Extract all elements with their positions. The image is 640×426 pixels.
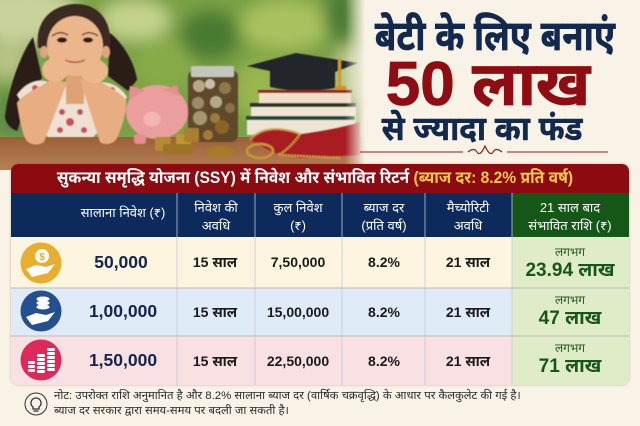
title line 3: से ज्यादा का फंड [382, 110, 582, 148]
header: investment period [194, 200, 238, 233]
header: total investment: (₹) [290, 218, 306, 233]
row 3 maturity: 21 साल [446, 353, 490, 369]
row 3 background [11, 336, 629, 385]
row 1 result: 23.94 लाख [525, 260, 615, 281]
coin stacks [155, 137, 171, 151]
row 1 total: 7,50,000 [271, 254, 325, 270]
row 3 result: लगभग [555, 341, 585, 355]
result column background [512, 237, 629, 385]
icon: gold coin in hand: $ [39, 252, 45, 263]
red cloth with gold jewellery [250, 122, 360, 158]
row 2 result: 47 लाख [539, 308, 601, 329]
header: expected amount: संभावित राशि (₹) [528, 218, 612, 233]
row 3 rate: 8.2% [368, 353, 400, 369]
face [66, 70, 84, 104]
header: maturity period [446, 200, 490, 233]
row 3 period: 15 साल [193, 353, 237, 369]
hair and pigtails [5, 37, 42, 131]
row 2 period: 15 साल [193, 304, 237, 320]
header: investment period: निवेश की [194, 200, 238, 215]
row 2 result [538, 293, 602, 329]
title line 2: 50 lakh: 50 लाख [386, 50, 590, 119]
header: interest rate: ब्याज दर [364, 200, 404, 215]
column and row grid lines [11, 193, 629, 385]
header: investment period: अवधि [202, 218, 230, 233]
header: expected amount [528, 200, 612, 233]
column header band [11, 193, 629, 237]
row 1 rate: 8.2% [368, 254, 400, 270]
row 1 background [11, 237, 629, 288]
header: interest rate: (प्रति वर्ष) [361, 218, 407, 233]
title line 1: बेटी के लिए बनाएं [375, 12, 615, 59]
icon: blue coin stack in hand [20, 290, 62, 332]
header: expected amount: 21 साल बाद [540, 200, 600, 215]
icon: gold coin in hand [20, 242, 62, 284]
icon: light bulb [24, 392, 48, 416]
piggy bank [126, 85, 188, 139]
ornamental divider [360, 145, 608, 154]
row 2 annual amount: 1,00,000 [89, 301, 157, 321]
table heading text: सुकन्या समृद्धि योजना (SSY) में निवेश और संभावित रिटर्न (ब्याज दर: 8.2% प्रति वर्ष) [57, 169, 573, 187]
hero photo: girl with piggy bank, coins, books [0, 0, 364, 170]
row 2 maturity: 21 साल [446, 304, 490, 320]
table card [11, 164, 629, 385]
header: interest rate [361, 200, 407, 233]
footnote [54, 388, 521, 417]
graduation cap [247, 53, 358, 91]
row 1 result [525, 245, 615, 281]
row 3 result: 71 लाख [539, 356, 601, 377]
row 1 annual amount: 50,000 [94, 252, 148, 272]
books [259, 91, 351, 105]
dress [17, 81, 127, 137]
row 3 total: 22,50,000 [267, 353, 329, 369]
header: total investment: कुल निवेश [273, 200, 323, 215]
arms and hands [17, 78, 67, 144]
row 2 rate: 8.2% [368, 304, 400, 320]
row 1 maturity: 21 साल [446, 254, 490, 270]
row 2 result: लगभग [555, 293, 585, 307]
row 3 annual amount: 1,50,000 [89, 350, 157, 370]
row 2 background [11, 288, 629, 336]
footnote: नोट: उपरोक्त राशि अनुमानित है और 8.2% सालाना ब्याज दर (वार्षिक चक्रवृद्धि) के आधार पर कैलकुलेट की गई है। [54, 390, 521, 402]
jar of coins [188, 70, 238, 142]
header: maturity period: मैच्योरिटी [447, 200, 489, 215]
row 2 total: 15,00,000 [267, 304, 329, 320]
header: total investment [273, 200, 323, 233]
header: annual investment: सालाना निवेश (₹) [81, 205, 165, 220]
header: maturity period: अवधि [454, 218, 482, 233]
footnote: ब्याज दर सरकार द्वारा समय-समय पर बदली जा सकती है। [54, 405, 289, 417]
table [0, 137, 365, 170]
row 3 result [539, 341, 602, 377]
table heading band [11, 164, 629, 193]
result column header [512, 193, 629, 237]
row 1 result: लगभग [555, 245, 585, 259]
icon: pink coin stacks [20, 340, 62, 380]
row 1 period: 15 साल [193, 254, 237, 270]
